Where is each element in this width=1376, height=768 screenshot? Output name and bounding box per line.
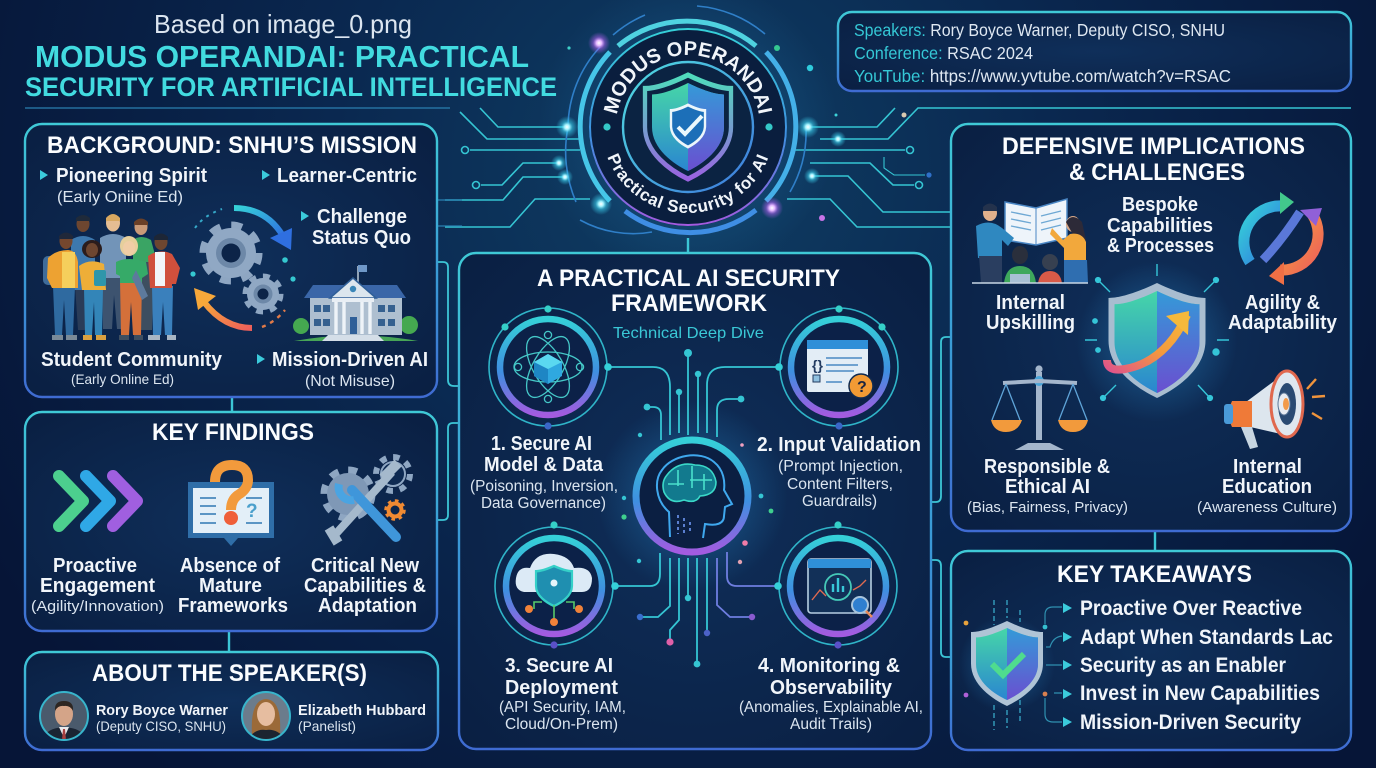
caption 4: Audit Trails) — [790, 716, 872, 733]
caption 4: Observability — [770, 677, 893, 699]
caption 3 — [499, 655, 626, 733]
takeaway list: Proactive Over Reactive — [1080, 597, 1302, 620]
title: MODUS OPERANDAI: PRACTICAL — [35, 39, 529, 74]
caption 4: 4. Monitoring & — [758, 655, 900, 677]
pillar 1: secure AI model and data — [470, 305, 618, 512]
caption 2: 2. Input Validation — [757, 434, 921, 456]
connectors between panels — [229, 238, 1155, 657]
label: responsible AI: Responsible & — [984, 456, 1110, 478]
panel: key takeaways — [951, 551, 1351, 750]
icon: gears and wrenches — [324, 457, 410, 543]
icon: code window with question — [775, 305, 898, 430]
caption 1: Model & Data — [484, 454, 604, 476]
finding: critical new capabilities: Capabilities & — [304, 575, 426, 597]
icon: scales — [991, 365, 1088, 450]
circuit traces: right — [787, 108, 1351, 227]
panel: practical AI security framework — [459, 253, 931, 749]
speaker info box: YouTube: https://www.yvtube.com/watch?v=RSAC — [854, 66, 1231, 86]
speaker names: Rory Boyce Warner — [96, 703, 228, 719]
emblem arc text: Practical Security for AI — [608, 153, 768, 213]
heading: key findings: KEY FINDINGS — [152, 419, 314, 446]
finding: proactive engagement — [31, 555, 164, 615]
heading: background: BACKGROUND: SNHU’S MISSION — [47, 132, 417, 159]
finding: critical new capabilities: Adaptation — [318, 595, 417, 617]
central emblem — [552, 5, 846, 244]
caption 4: (Anomalies, Explainable AI, — [739, 699, 923, 716]
label: internal upskilling: Internal — [996, 292, 1065, 314]
icon: book with question mark — [188, 465, 274, 546]
speaker info box — [838, 12, 1351, 91]
heading: defensive: & CHALLENGES — [1069, 159, 1245, 186]
avatar: Rory Boyce Warner — [40, 692, 90, 742]
mission bullets: (Not Misuse) — [305, 373, 395, 390]
takeaway list — [1063, 597, 1333, 734]
finding: absence of mature frameworks — [178, 555, 288, 617]
finding: critical new capabilities — [304, 555, 426, 617]
label: bespoke capabilities: Capabilities — [1107, 215, 1213, 237]
icon: book with question mark: ? — [246, 501, 258, 522]
caption: student community: (Early Online Ed) — [71, 371, 174, 387]
panel: key findings — [25, 412, 437, 631]
emblem arc text: MODUS OPERANDAI — [604, 41, 772, 114]
backpack — [43, 256, 55, 285]
caption 2: Content Filters, — [787, 476, 893, 493]
label: agility: Adaptability — [1228, 312, 1338, 334]
takeaway list: Adapt When Standards Lac — [1080, 626, 1333, 649]
finding: proactive engagement: Engagement — [40, 575, 155, 597]
label: agility: Agility & — [1245, 292, 1320, 314]
label: responsible AI: (Bias, Fairness, Privacy) — [967, 499, 1128, 516]
circuit lines to the AI core — [597, 349, 787, 667]
heading: takeaways: KEY TAKEAWAYS — [1057, 561, 1252, 588]
student red jacket — [148, 234, 180, 340]
caption: student community: Student Community — [41, 349, 223, 371]
back row — [71, 214, 157, 330]
caption 1: Data Governance) — [481, 495, 606, 512]
takeaway list: Security as an Enabler — [1080, 654, 1286, 677]
emblem arc text — [604, 41, 772, 213]
icon: atom network — [489, 305, 612, 430]
pillar 2: input validation — [757, 305, 921, 510]
speaker names: Elizabeth Hubbard — [298, 703, 426, 719]
caption 4 — [739, 655, 923, 733]
label: bespoke capabilities: Bespoke — [1122, 194, 1198, 216]
speaker names: (Panelist) — [298, 718, 356, 734]
icon: dashboard with magnifier — [774, 521, 897, 649]
student green shirt — [116, 236, 148, 340]
speaker info box: Speakers: Rory Boyce Warner, Deputy CISO, SNHU — [854, 20, 1225, 40]
icon: gears and cycle arrows — [190, 208, 296, 328]
label: internal education — [1197, 456, 1337, 516]
emblem shield — [645, 75, 731, 179]
icon: cloud with shield — [495, 521, 619, 649]
finding: proactive engagement: Proactive — [53, 555, 137, 577]
caption 1: (Poisoning, Inversion, — [470, 478, 618, 495]
label: internal upskilling: Upskilling — [986, 312, 1075, 334]
icon: teaching group — [972, 199, 1088, 283]
caption 3: Cloud/On-Prem) — [505, 716, 618, 733]
caption: student community — [41, 349, 223, 387]
label: internal education: Internal — [1233, 456, 1302, 478]
mission bullets: Mission-Driven AI — [272, 349, 428, 371]
speaker names: (Deputy CISO, SNHU) — [96, 718, 226, 734]
mission bullets: Status Quo — [312, 227, 411, 249]
caption 1 — [470, 433, 618, 512]
label: agility — [1228, 292, 1338, 334]
heading: defensive: DEFENSIVE IMPLICATIONS — [1002, 133, 1305, 160]
takeaway connectors — [1045, 607, 1062, 722]
icon: code window with question: ? — [857, 379, 867, 396]
caption 3: Deployment — [505, 677, 618, 699]
mission bullets — [40, 165, 428, 390]
panel: background, SNHU mission — [25, 124, 437, 397]
based-on caption: Based on image_0.png — [154, 9, 412, 39]
finding: absence of mature frameworks: Mature — [199, 575, 262, 597]
caption 2: Guardrails) — [802, 493, 877, 510]
circuit traces: left — [25, 108, 590, 227]
panel: about the speakers — [25, 652, 438, 750]
title — [25, 39, 557, 102]
label: responsible AI: Ethical AI — [1005, 476, 1090, 498]
label: bespoke capabilities — [1107, 194, 1214, 257]
icon: check shield — [959, 600, 1055, 730]
caption 3: 3. Secure AI — [505, 655, 613, 677]
mission bullets: (Early Oniine Ed) — [57, 189, 183, 206]
icon: code window with question: {} — [812, 357, 823, 373]
heading: framework — [537, 265, 840, 317]
pillar 4: monitoring and observability — [739, 521, 923, 733]
takeaway list: Invest in New Capabilities — [1080, 682, 1320, 705]
title: SECURITY FOR ARTIFICIAL INTELLIGENCE — [25, 72, 557, 102]
finding: critical new capabilities: Critical New — [311, 555, 419, 577]
mission bullets: Learner-Centric — [277, 165, 417, 187]
AI core: brain head — [636, 440, 748, 552]
label: internal education: Education — [1222, 476, 1312, 498]
finding: absence of mature frameworks: Absence of — [180, 555, 280, 577]
heading: framework: FRAMEWORK — [611, 290, 768, 317]
mission bullets: Challenge — [317, 206, 407, 228]
finding: absence of mature frameworks: Frameworks — [178, 595, 288, 617]
icon: megaphone — [1224, 371, 1325, 449]
icon: chevrons — [59, 476, 137, 526]
icon: student community — [43, 214, 180, 340]
caption 3: (API Security, IAM, — [499, 699, 626, 716]
panel: defensive implications — [951, 124, 1351, 531]
label: bespoke capabilities: & Processes — [1107, 235, 1214, 257]
label: responsible AI — [967, 456, 1128, 516]
avatar: Elizabeth Hubbard — [242, 692, 290, 742]
mission bullets: Pioneering Spirit — [56, 165, 207, 187]
caption 2: (Prompt Injection, — [778, 458, 903, 475]
icon: central shield with rising arrow — [1077, 262, 1237, 422]
label: internal upskilling — [986, 292, 1075, 334]
takeaway list: Mission-Driven Security — [1080, 711, 1301, 734]
finding: proactive engagement: (Agility/Innovation) — [31, 598, 164, 615]
caption 2 — [757, 434, 921, 510]
icon: university building — [293, 265, 418, 341]
speaker names — [96, 703, 426, 734]
caption 1: 1. Secure AI — [491, 433, 592, 455]
label: internal education: (Awareness Culture) — [1197, 499, 1337, 516]
subheading: Technical Deep Dive — [613, 325, 764, 342]
heading: defensive — [1002, 133, 1305, 186]
heading: about: ABOUT THE SPEAKER(S) — [92, 660, 367, 687]
student yellow sweater — [79, 240, 106, 340]
icon: cycle arrows — [1244, 192, 1322, 285]
speaker info box: Conference: RSAC 2024 — [854, 43, 1033, 63]
heading: framework: A PRACTICAL AI SECURITY — [537, 265, 840, 292]
student orange jacket — [47, 232, 78, 340]
pillar 3: secure AI deployment — [495, 521, 626, 733]
